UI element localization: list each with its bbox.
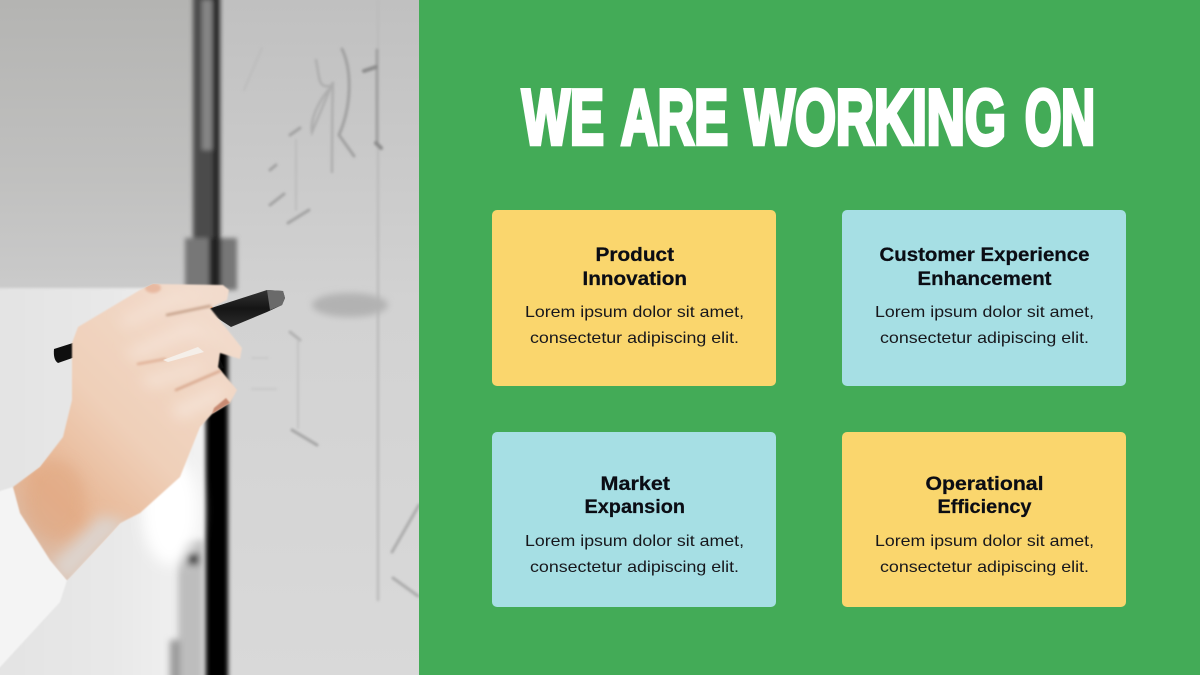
photo: glow near wrist (142, 455, 198, 565)
body text: consectetur adipiscing elit. (530, 559, 739, 576)
body text (525, 304, 744, 347)
heading (582, 244, 687, 290)
heading (584, 473, 685, 518)
photo: orange pen band (210, 306, 212, 308)
body text: Lorem ipsum dolor sit amet, (875, 304, 1094, 321)
heading: Enhancement (918, 268, 1052, 290)
photo: gap between fingers (163, 347, 204, 362)
heading (880, 244, 1090, 290)
photo: hand writing on whiteboard (0, 0, 419, 675)
photo: hand shading (25, 283, 230, 585)
body text: Lorem ipsum dolor sit amet, (525, 304, 744, 321)
photo: hand (13, 283, 242, 585)
photo: shirt sleeve (0, 487, 67, 675)
photo: bright lower wall (0, 288, 205, 675)
card: Operational Efficiency (842, 432, 1126, 607)
photo: pen body (205, 290, 285, 327)
title (522, 73, 1095, 161)
photo: wrist grey fade (50, 515, 130, 585)
title: WE (522, 73, 604, 161)
photo: finger highlights (130, 309, 218, 418)
photo: base tone (203, 0, 220, 675)
photo: knuckle (145, 283, 161, 293)
heading: Expansion (584, 496, 685, 518)
title: ON (1025, 73, 1095, 161)
body text (525, 533, 744, 576)
heading: Market (600, 473, 671, 495)
photo: pen back end (54, 343, 74, 363)
heading: Efficiency (938, 496, 1032, 518)
heading: Customer Experience (880, 244, 1090, 266)
photo: whiteboard frame, upper (185, 0, 237, 290)
heading (926, 473, 1044, 518)
photo: black frame post (206, 345, 228, 675)
body text: Lorem ipsum dolor sit amet, (525, 533, 744, 550)
photo: whiteboard frame, lower (170, 540, 204, 675)
photo: wrist warm shade (25, 460, 85, 540)
photo: finger creases (138, 306, 220, 390)
photo: pen behind fingers (218, 359, 224, 368)
green background panel (419, 0, 1200, 675)
body text (875, 533, 1094, 576)
body text (875, 304, 1094, 347)
body text: Lorem ipsum dolor sit amet, (875, 533, 1094, 550)
body text: consectetur adipiscing elit. (880, 559, 1089, 576)
body text: consectetur adipiscing elit. (530, 330, 739, 347)
photo: whiteboard scribbles (268, 47, 419, 601)
card: Customer Experience Enhancement (842, 210, 1126, 386)
heading: Product (596, 244, 675, 266)
card: Product Innovation (492, 210, 776, 386)
body text: consectetur adipiscing elit. (880, 330, 1089, 347)
title: WORKING (745, 73, 1006, 161)
photo: pen reflection smudge (312, 293, 388, 317)
photo: back wall (0, 0, 194, 254)
photo: fingertip nail (212, 398, 230, 414)
heading: Operational (926, 473, 1044, 495)
title: ARE (621, 73, 728, 161)
photo: whiteboard surface (220, 0, 419, 675)
heading: Innovation (582, 268, 687, 290)
photo: pen tip (267, 290, 285, 310)
card: Market Expansion (492, 432, 776, 607)
